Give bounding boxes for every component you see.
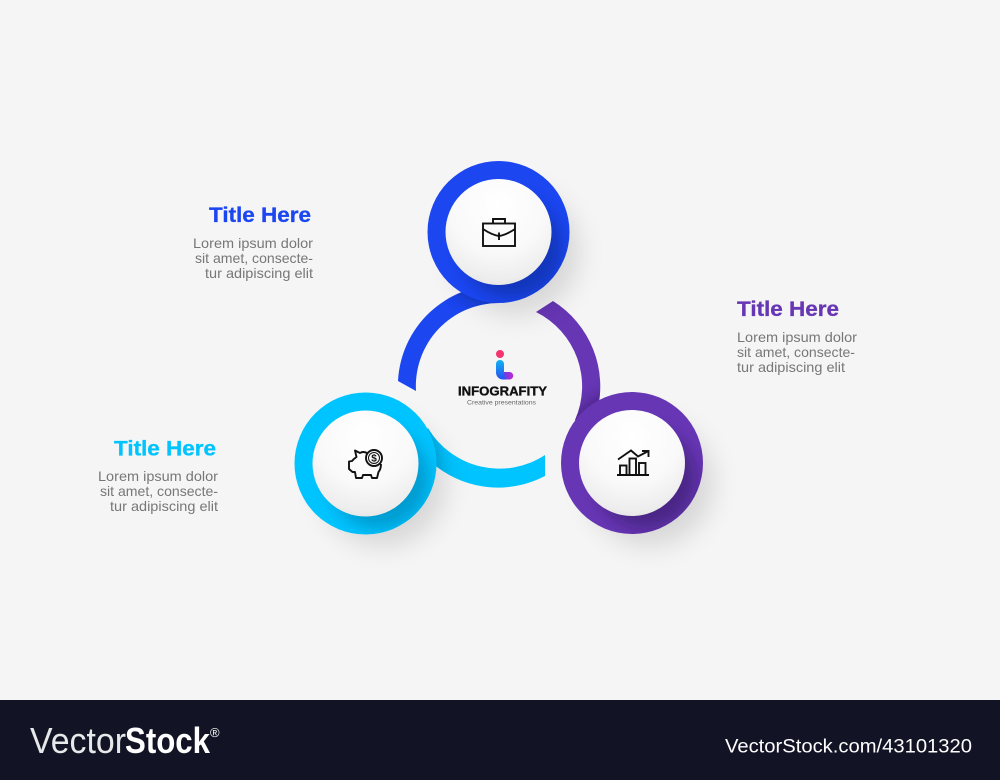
arc: purple segment [536, 301, 600, 420]
logo wordmark: INFOGRAFITY [458, 384, 548, 398]
text block: right purple [737, 297, 857, 375]
body text: sit amet, consecte- [195, 250, 313, 266]
icon: piggy bank: $ [371, 454, 377, 464]
footer bar [0, 700, 1000, 780]
heading: Title Here [737, 297, 839, 321]
text block: top left blue [193, 203, 313, 281]
node: right purple ring [561, 392, 712, 545]
body text: Lorem ipsum dolor [737, 329, 857, 345]
body text: tur adipiscing elit [737, 359, 845, 375]
body text: Lorem ipsum dolor [193, 235, 313, 251]
footer logo: Vector [30, 720, 126, 761]
logo mark [496, 350, 513, 380]
node: top blue ring [428, 161, 578, 314]
footer id: VectorStock.com/43101320 [725, 736, 972, 758]
node: left cyan ring [294, 392, 445, 545]
body text [737, 329, 857, 375]
footer logo: Stock [125, 720, 211, 761]
body text: sit amet, consecte- [100, 483, 218, 499]
body text: tur adipiscing elit [205, 265, 313, 281]
heading: Title Here [209, 203, 311, 227]
arc: blue segment [398, 292, 498, 391]
body text: sit amet, consecte- [737, 344, 855, 360]
center logo [458, 350, 548, 406]
icon: growth chart [617, 450, 649, 475]
icon: piggy bank [349, 450, 382, 478]
body text: tur adipiscing elit [110, 498, 218, 514]
body text: Lorem ipsum dolor [98, 468, 218, 484]
footer logo: ® [210, 725, 220, 740]
logo tagline: Creative presentations [467, 400, 537, 406]
body text [193, 235, 313, 281]
heading: Title Here [114, 436, 216, 460]
icon: briefcase [483, 219, 515, 246]
arc: cyan segment [427, 428, 545, 488]
text block: left cyan [98, 436, 218, 514]
body text [98, 468, 218, 514]
